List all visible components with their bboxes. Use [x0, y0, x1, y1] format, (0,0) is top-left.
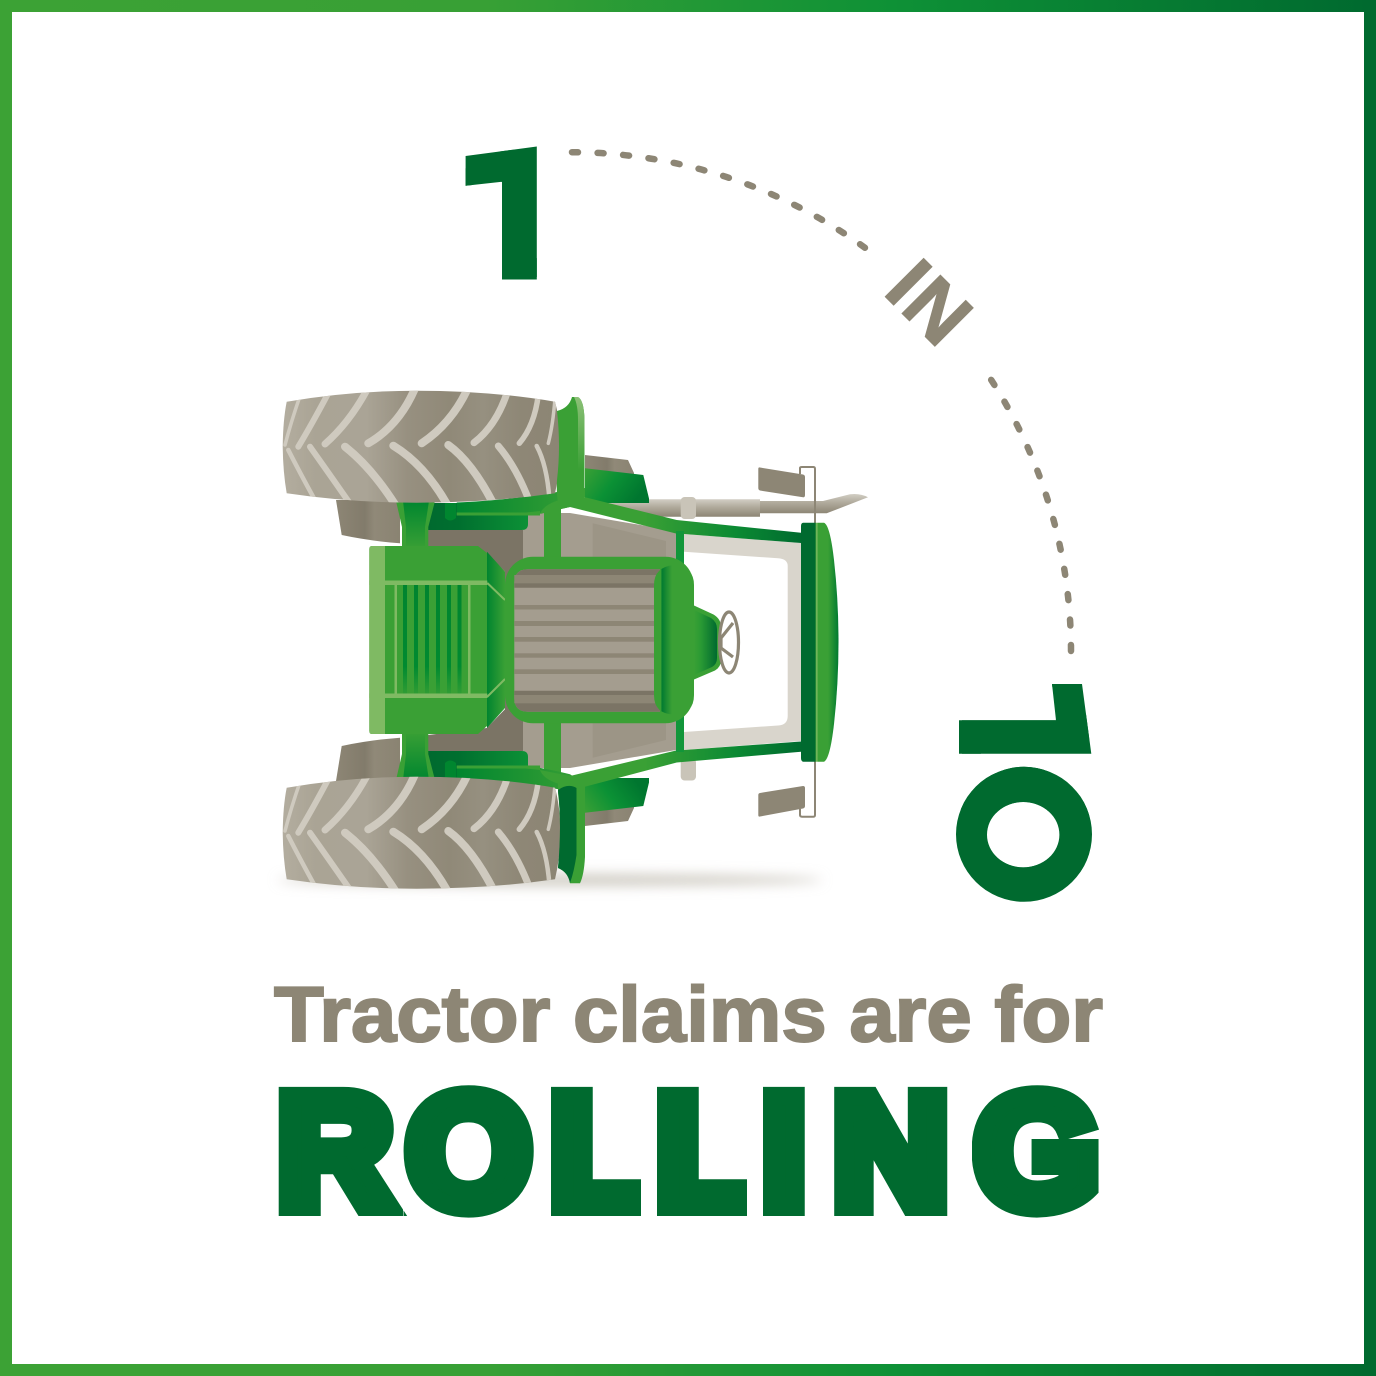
rear wing panel	[801, 523, 838, 762]
dotted arc: from IN to 10	[988, 375, 1071, 651]
engine deck with louvres	[514, 569, 660, 712]
radiator grille	[403, 585, 462, 694]
wing mirror bottom	[681, 758, 815, 817]
mudguard bottom	[558, 776, 585, 883]
mudguard top highlight	[574, 397, 584, 470]
wing mirror top	[758, 467, 815, 523]
engine end cap	[654, 565, 694, 714]
cab floor	[684, 534, 801, 750]
mudguard top	[557, 397, 584, 509]
word IN: IN	[870, 243, 989, 362]
chassis upper half	[336, 455, 676, 600]
steering wheel	[720, 612, 738, 673]
number 1: 1	[445, 111, 579, 317]
engine frame	[505, 557, 694, 723]
radiator hood	[369, 546, 505, 734]
rear tyre bottom	[283, 772, 561, 892]
chassis lower half	[336, 681, 676, 826]
headline word ROLLING: ROLLING	[278, 1062, 1099, 1240]
dotted arc: from 1 to IN	[572, 152, 868, 250]
number 10: 10	[922, 663, 1128, 901]
steering column	[694, 606, 721, 680]
rear tyre top	[283, 386, 561, 506]
illustration: tractor from above, rolled on its side	[278, 386, 868, 892]
ground shadow	[278, 874, 822, 886]
heading line: Tractor claims are for	[274, 970, 1103, 1058]
cab frame beams	[540, 496, 801, 788]
exhaust rod	[597, 494, 868, 519]
